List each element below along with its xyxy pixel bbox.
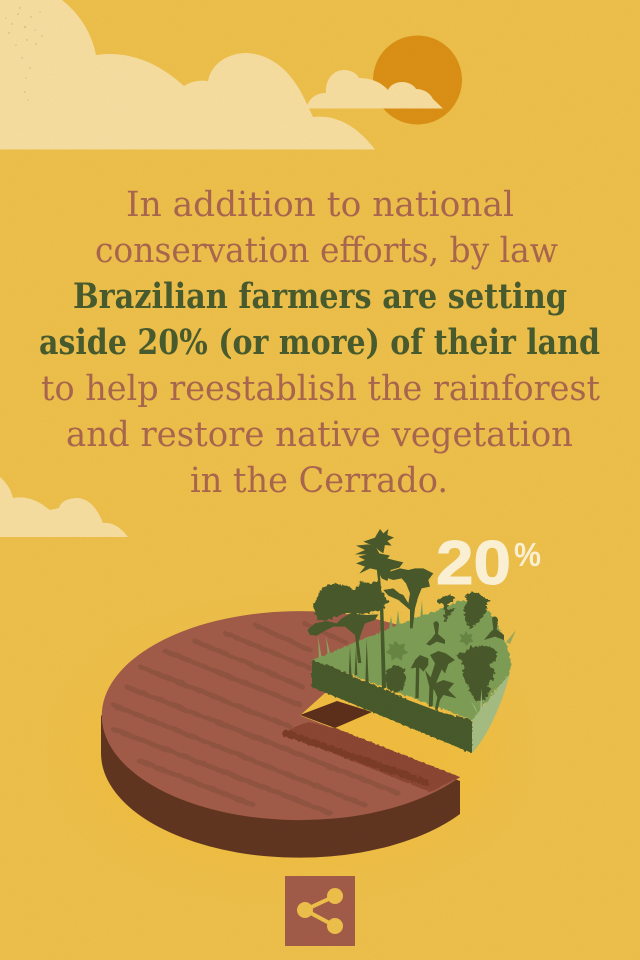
main statement text — [39, 185, 600, 501]
sun — [373, 36, 462, 124]
wedge front soil face — [312, 660, 472, 753]
main statement text: in the Cerrado. — [190, 461, 448, 501]
trees (traced, upper left) — [307, 529, 433, 688]
centre palm — [425, 651, 455, 707]
big plant — [457, 645, 497, 702]
main statement text: conservation efforts, by law — [95, 231, 558, 271]
pie chart: land use — [85, 611, 495, 865]
back shrub — [463, 593, 491, 628]
pie side wall — [101, 716, 460, 858]
tall palm tree — [355, 529, 403, 688]
small back tree — [436, 595, 456, 622]
faded rosette right — [459, 631, 473, 646]
20% label — [436, 529, 541, 598]
forest wedge: 20% — [307, 529, 516, 753]
main statement text: and restore native vegetation — [66, 415, 573, 455]
pale grass — [471, 688, 483, 715]
small cloud over sun — [306, 70, 443, 108]
lower palm — [432, 680, 457, 711]
wedge side, light curved edge — [472, 672, 510, 753]
darker exposed furrow strip — [282, 722, 460, 792]
back grass blades — [318, 600, 516, 660]
20% label: 20 — [436, 529, 511, 598]
left shrub — [385, 665, 406, 693]
lower left cloud — [0, 477, 128, 537]
wedge top surface — [312, 600, 511, 720]
small palm — [411, 655, 428, 698]
tall grass blades — [349, 638, 369, 683]
mid seedling — [426, 621, 445, 646]
pie top face: farmland 80% — [102, 611, 460, 820]
furrows — [113, 624, 398, 813]
20% label: % — [514, 536, 541, 573]
share icon — [285, 876, 355, 946]
main statement text: Brazilian farmers are setting — [73, 276, 567, 317]
notch inner wall — [300, 701, 372, 728]
branching tree — [383, 568, 433, 628]
faded rosette left — [386, 641, 408, 661]
soft ground halo — [85, 635, 495, 865]
right seedling — [484, 616, 504, 640]
main statement text: to help reestablish the rainforest — [41, 369, 600, 409]
vegetation on wedge (traced, lower right) — [385, 593, 504, 715]
large cloud — [0, 0, 375, 150]
speckle texture on large cloud — [5, 7, 43, 101]
main statement text: In addition to national — [126, 185, 514, 225]
broad canopy tree — [307, 580, 388, 663]
